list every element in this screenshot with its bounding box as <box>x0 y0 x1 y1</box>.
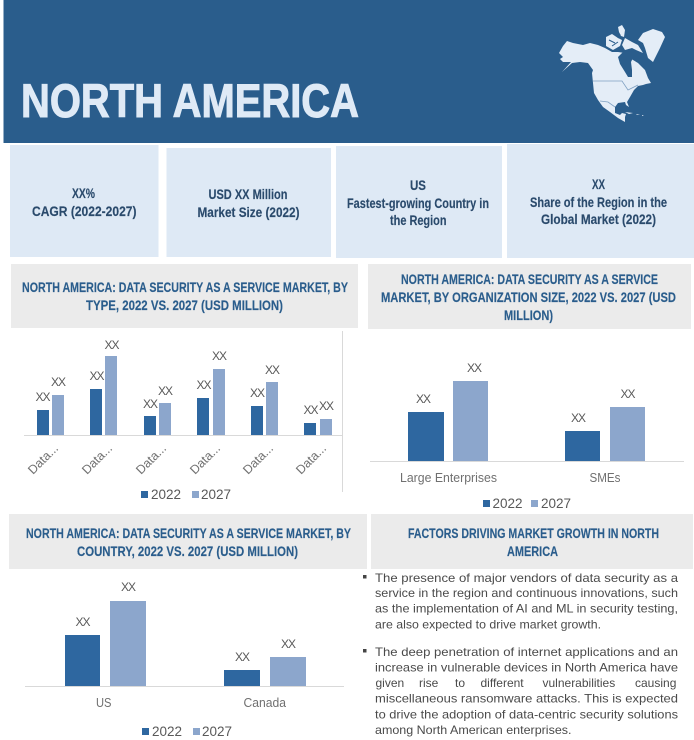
bar chart: by type: XX <box>212 349 227 363</box>
text block: factor 1: The presence of major vendors of data security as a <box>375 571 678 585</box>
text block: factor 2 <box>363 645 678 737</box>
bar chart: by type: XX <box>89 369 104 383</box>
text block: factor 1: as the implementation of AI and ML in security testing, <box>375 602 678 616</box>
text block: factor 2: rise <box>419 676 439 690</box>
card: CAGR <box>10 145 158 257</box>
text block: factor 1 <box>363 571 678 632</box>
bar chart: by type: XX <box>265 363 280 377</box>
bar chart: by type: Data... <box>293 441 329 477</box>
bar chart: by type: Data... <box>240 441 276 477</box>
text block: factor 2: increase in vulnerable devices in North America have <box>375 660 678 674</box>
text block: factor 2: to <box>455 676 465 690</box>
bar chart: by country: XX <box>281 637 296 651</box>
bar chart: by type: XX <box>303 403 318 417</box>
card: CAGR: CAGR (2022-2027) <box>32 204 136 219</box>
bar chart: by type: XX <box>35 390 50 404</box>
legend: by organization size <box>483 496 571 511</box>
title: NORTH AMERICA <box>21 74 359 127</box>
bar chart: by organization size: Large Enterprises <box>400 471 497 485</box>
card: fastest-growing country: Fastest-growing Country in <box>347 196 489 211</box>
heading: by country: NORTH AMERICA: DATA SECURITY AS A SERVICE MARKET, BY <box>26 526 351 541</box>
bar chart: by country: US <box>96 696 112 710</box>
text block: factor 1: are also expected to drive market growth. <box>375 618 601 632</box>
legend: by country: 2022 <box>152 724 182 739</box>
heading: by country: COUNTRY, 2022 VS. 2027 (USD MILLION) <box>77 544 298 559</box>
text block: factor 2: given <box>376 676 404 690</box>
card: market size: USD XX Million <box>208 187 288 202</box>
bar chart: by type: XX <box>250 386 265 400</box>
card: fastest-growing country: the Region <box>390 213 446 228</box>
text block: factor 2: vulnerabilities <box>542 676 615 690</box>
bar chart: by type: Data... <box>187 441 223 477</box>
bar chart: by country: Canada <box>244 696 286 710</box>
icon: North America map <box>559 25 665 122</box>
card: share of the region: XX <box>592 177 605 192</box>
bar chart: by country <box>25 580 344 739</box>
legend: by organization size: 2027 <box>541 496 571 511</box>
bar chart: by organization size: SMEs <box>590 471 620 485</box>
text block: factor 2: The deep penetration of internet applications and an <box>375 645 678 659</box>
bar chart: by organization size: XX <box>571 411 586 425</box>
legend: by organization size: 2022 <box>492 496 522 511</box>
bar chart: by type: XX <box>143 397 158 411</box>
bar chart: by type: XX <box>196 378 211 392</box>
card: fastest-growing country <box>336 146 502 258</box>
legend: by country: 2027 <box>202 724 232 739</box>
bar chart: by organization size: XX <box>620 387 635 401</box>
card: market size <box>166 148 331 257</box>
card: share of the region: Global Market (2022) <box>541 212 656 227</box>
bar chart: by organization size: XX <box>416 392 431 406</box>
bar chart: by type: Data... <box>79 441 115 477</box>
bar chart: by organization size: XX <box>467 361 482 375</box>
legend: by type: 2022 <box>151 487 181 502</box>
legend: by type <box>141 487 231 502</box>
card: share of the region <box>507 144 694 258</box>
heading: by type: TYPE, 2022 VS. 2027 (USD MILLION) <box>86 298 283 313</box>
heading: by organization size <box>368 264 691 329</box>
heading: factors driving market growth: AMERICA <box>507 544 558 559</box>
text block: factor 2: to drive the adoption of data-centric security solutions <box>375 708 678 722</box>
heading: by type <box>11 264 358 328</box>
card: market size: Market Size (2022) <box>198 205 300 220</box>
heading: factors driving market growth <box>371 514 693 569</box>
legend: by type: 2027 <box>201 487 231 502</box>
bar chart: by type <box>24 331 343 502</box>
card: share of the region: Share of the Region in the <box>530 195 667 210</box>
bar chart: by country: XX <box>75 615 90 629</box>
heading: by type: NORTH AMERICA: DATA SECURITY AS A SERVICE MARKET, BY <box>22 280 348 295</box>
heading: by organization size: MILLION) <box>504 308 553 323</box>
bar chart: by country: XX <box>235 650 250 664</box>
text block: factor 2: miscellaneous ransomware attacks. This is expected <box>375 692 678 706</box>
bar chart: by type: XX <box>104 338 119 352</box>
bar chart: by type: XX <box>158 384 173 398</box>
bar chart: by type: XX <box>51 375 66 389</box>
text block: factor 2: among North American enterprises. <box>375 723 572 737</box>
text block: factor 2: causing <box>635 676 676 690</box>
bar chart: by type: Data... <box>25 441 61 477</box>
card: fastest-growing country: US <box>410 178 426 193</box>
text block: factor 2: different <box>480 676 524 690</box>
heading: by country <box>9 514 367 569</box>
bar chart: by type: XX <box>319 399 334 413</box>
card: CAGR: XX% <box>72 186 95 201</box>
bar chart: by country: XX <box>121 580 136 594</box>
bar chart: by organization size <box>370 361 684 511</box>
legend: by country <box>142 724 232 739</box>
bar chart: by type: Data... <box>133 441 169 477</box>
text block: factor 1: service in the region and continuous innovations, such <box>375 586 678 600</box>
banner <box>4 0 694 143</box>
